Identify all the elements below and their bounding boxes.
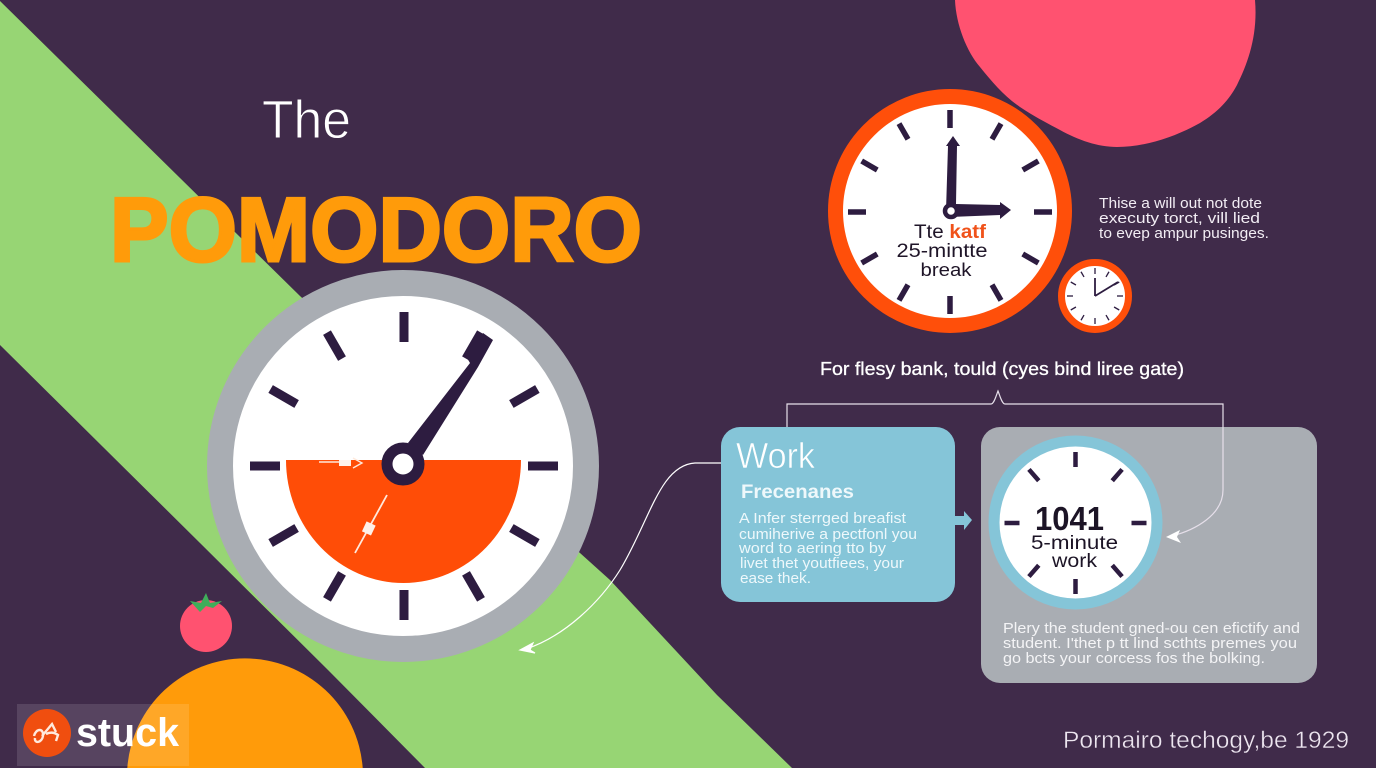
title: The: The [262, 90, 351, 150]
grey panel clock ticks [1004, 452, 1146, 594]
orange half-disc segment [286, 460, 521, 583]
work heading: Work [736, 435, 816, 476]
grey panel body text: Plery the student gned-ou cen efictify and [1003, 620, 1300, 637]
main clock face [220, 283, 586, 649]
break clock ticks [848, 110, 1052, 314]
small clock [1062, 262, 1128, 330]
main clock [220, 283, 586, 649]
grey panel body text [1003, 620, 1300, 667]
grey panel clock face [994, 441, 1157, 604]
break clock label: break [920, 260, 973, 280]
main clock ticks [250, 312, 558, 620]
grey panel background [981, 427, 1317, 683]
footer text: Pormairo techogy,be 1929 [1063, 727, 1349, 754]
bracket heading: For flesy bank, tould (cyes bind liree gate) [820, 358, 1184, 379]
orange circle [127, 658, 363, 768]
pink blob [955, 0, 1256, 147]
grey panel clock label: 5-minute [1031, 533, 1118, 554]
small needle on segment [355, 495, 387, 553]
curved arrow to main clock [520, 463, 721, 653]
description text: to evep ampur pusinges. [1099, 225, 1269, 242]
title: POMODORO: POMODORO [110, 180, 642, 281]
description text: executy torct, vill lied [1099, 210, 1260, 227]
panel: work [721, 427, 955, 602]
logo [17, 704, 189, 766]
main clock hub [387, 448, 419, 480]
work body text: livet thet youtfiees, your [740, 555, 904, 572]
logo backing [17, 704, 189, 766]
small clock face [1062, 262, 1128, 330]
grey panel clock number: 1041 [1035, 500, 1104, 537]
break clock label: Tte katf [914, 222, 987, 243]
work panel background [721, 427, 955, 602]
grey panel clock label [1031, 533, 1118, 572]
break clock label [896, 222, 988, 280]
work body text [738, 510, 917, 587]
green diagonal band [0, 1, 792, 768]
logo glyph [34, 724, 58, 742]
break clock hub [945, 205, 957, 217]
work body text: A Infer sterrged breafist [739, 510, 907, 527]
tomato icon [180, 593, 232, 652]
break clock label: 25-mintte [896, 241, 988, 262]
logo badge [23, 709, 71, 757]
work body text: cumiherive a pectfonl you [739, 526, 917, 543]
grey panel clock label: work [1051, 551, 1098, 572]
break clock hands [946, 136, 1011, 219]
arrow between panels [955, 511, 972, 530]
logo wordmark: stuck [76, 711, 180, 755]
panel: grey break [981, 427, 1317, 683]
work body text: ease thek. [740, 570, 811, 587]
main clock hand [408, 333, 493, 455]
description text: Thise a will out not dote [1099, 195, 1262, 212]
bracket connector arrow [787, 391, 1223, 543]
break clock [836, 96, 1064, 326]
work subheading: Frecenanes [741, 482, 854, 503]
grey panel body text: go bcts your corcess fos the bolking. [1003, 650, 1265, 667]
break clock face [836, 96, 1064, 326]
small arrow on segment [319, 458, 362, 468]
grey panel body text: student. I'thet p tt lind scthts premes you [1003, 635, 1297, 652]
work body text: word to aering tto by [738, 540, 887, 557]
small clock hands [1095, 278, 1118, 296]
small clock ticks [1067, 268, 1123, 324]
description text [1099, 195, 1269, 242]
